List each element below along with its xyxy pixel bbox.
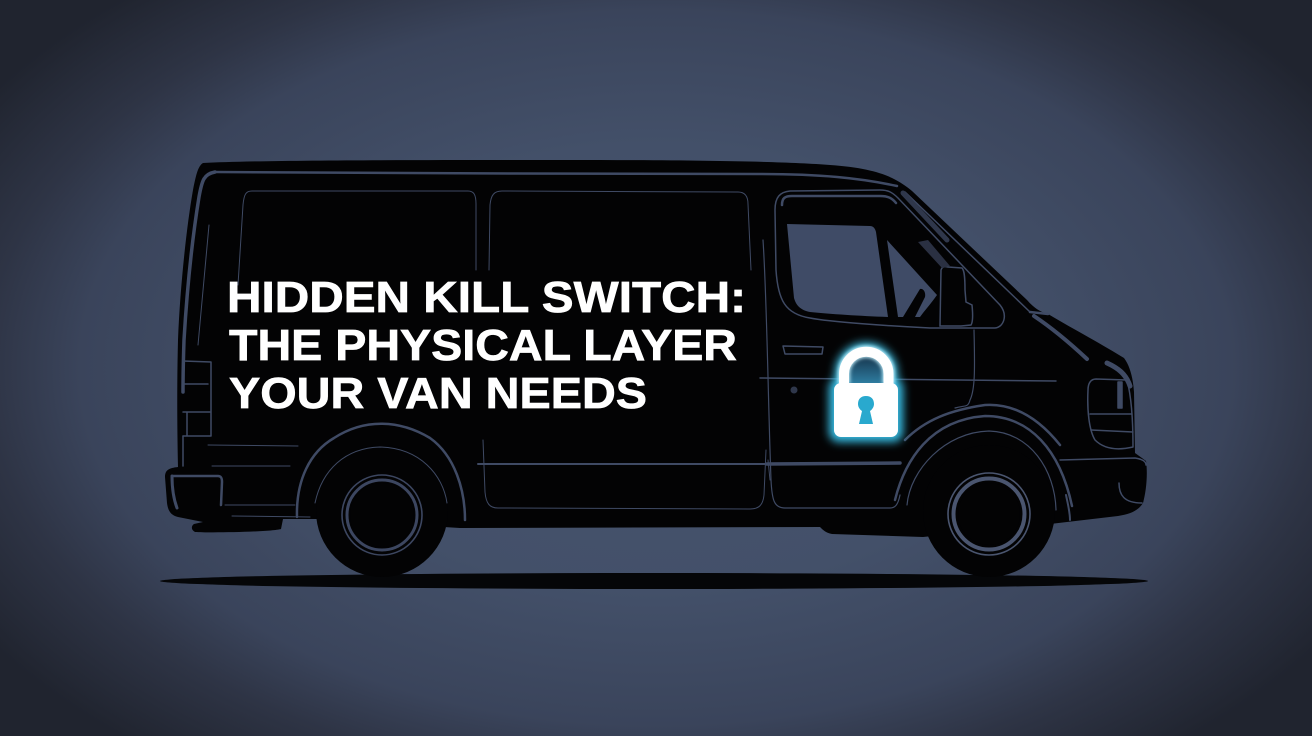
body highlight lines bbox=[172, 172, 1146, 520]
door window frame bbox=[775, 190, 1004, 328]
lock body bbox=[834, 383, 898, 437]
side panels bbox=[238, 191, 476, 285]
windshield trim bbox=[918, 240, 950, 268]
rear bumper bbox=[172, 476, 222, 505]
van silhouette bbox=[165, 160, 1147, 577]
title bbox=[227, 273, 746, 418]
lock glow bbox=[829, 351, 903, 442]
title: THE PHYSICAL LAYER bbox=[229, 321, 737, 370]
door handle bbox=[783, 346, 823, 354]
van body bbox=[165, 160, 1147, 537]
side mirror bbox=[940, 267, 973, 326]
keyhole bbox=[858, 396, 874, 424]
windshield edge bbox=[905, 192, 1030, 312]
title: YOUR VAN NEEDS bbox=[229, 369, 647, 418]
cab window bbox=[787, 224, 937, 317]
glowing padlock icon bbox=[829, 351, 903, 442]
front wheel bbox=[923, 445, 1055, 577]
ground shadow bbox=[160, 573, 1148, 589]
front bumper bbox=[1060, 458, 1146, 503]
rear wheel bbox=[316, 445, 448, 577]
headlight bbox=[1088, 379, 1133, 449]
lock shackle bbox=[848, 356, 885, 384]
door lock dot bbox=[790, 386, 798, 394]
door lines bbox=[763, 240, 900, 508]
rear tail lamp bbox=[183, 361, 211, 436]
title: HIDDEN KILL SWITCH: bbox=[227, 273, 746, 322]
wheel arches bbox=[297, 424, 465, 520]
